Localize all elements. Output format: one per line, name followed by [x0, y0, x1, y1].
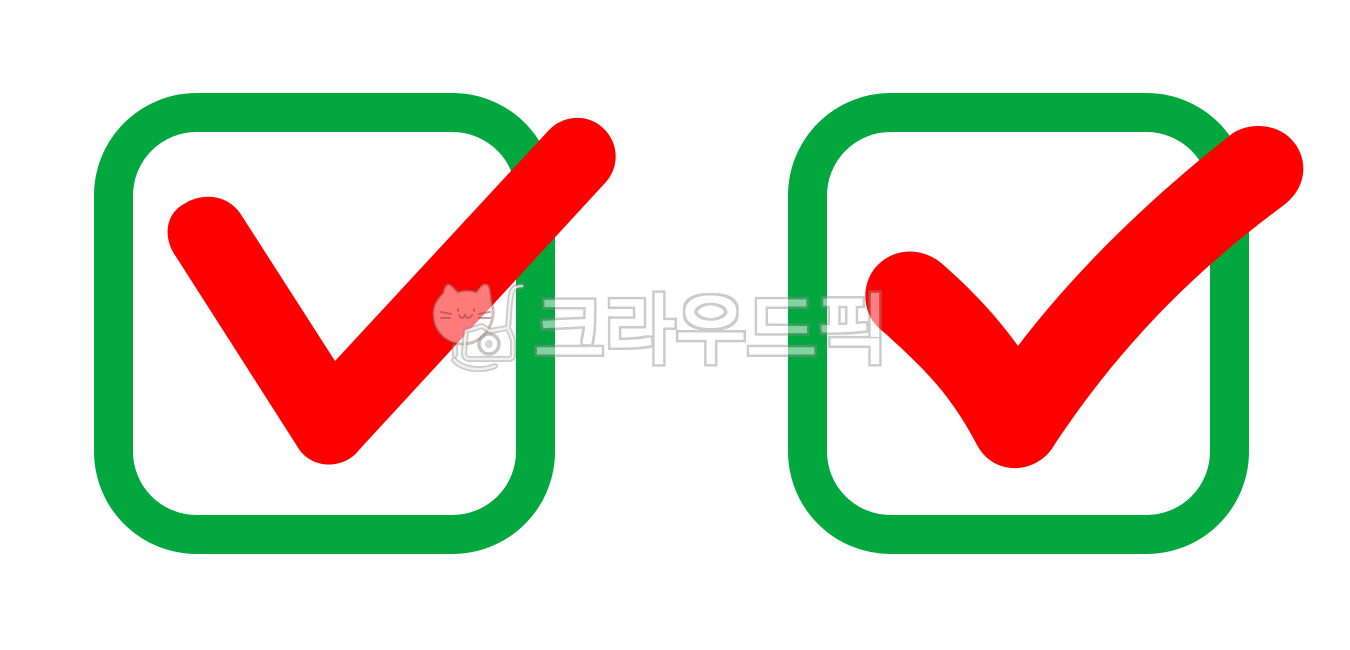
- icon: right green rounded checkbox: [808, 112, 1230, 534]
- icon: left green rounded checkbox: [114, 112, 536, 534]
- icon: left red geometric check mark: [168, 118, 616, 465]
- watermark: camera and strap: [454, 286, 522, 369]
- watermark: wordmark: 크라우드픽: [534, 269, 888, 379]
- watermark: [433, 269, 888, 379]
- watermark: cat face: [433, 284, 493, 344]
- icon: right red hand-drawn check mark: [865, 126, 1303, 468]
